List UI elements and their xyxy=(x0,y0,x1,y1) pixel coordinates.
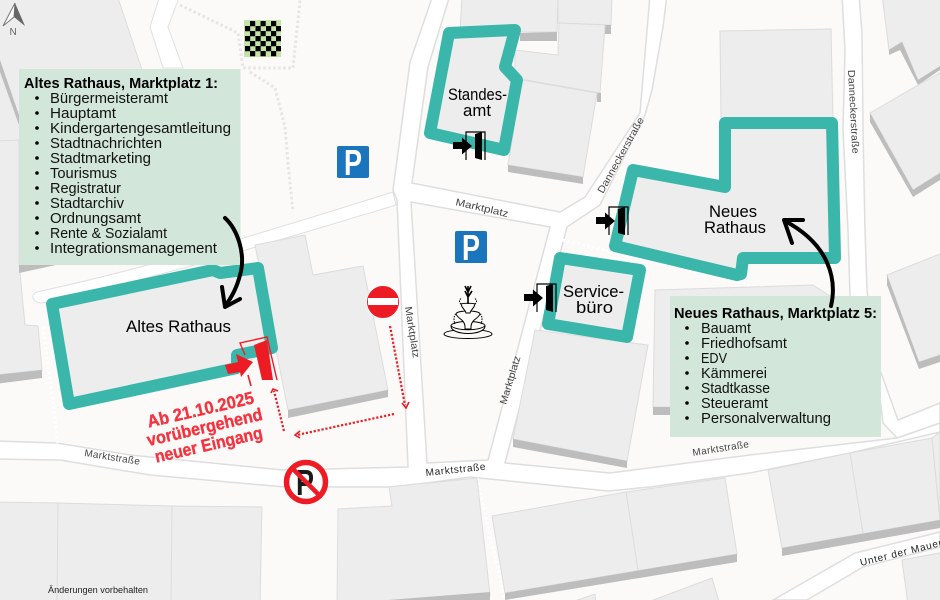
arrows: red dotted walking route xyxy=(271,326,409,438)
list: Integrationsmanagement xyxy=(50,240,218,257)
heading: Neues Rathaus, Marktplatz 5: xyxy=(674,305,877,322)
list: Stadtnachrichten xyxy=(50,135,162,152)
street labels xyxy=(84,70,940,569)
list: Stadtarchiv xyxy=(50,195,124,212)
list xyxy=(685,320,831,427)
list xyxy=(35,90,231,257)
label: Servicebüro xyxy=(563,282,624,317)
icon: parking sign upper: P xyxy=(344,142,362,183)
text: new entrance notice: vorübergehend xyxy=(145,404,264,450)
list: Personalverwaltung xyxy=(701,410,831,427)
outline: Standesamt xyxy=(430,30,517,150)
list: Kindergartengesamtleitung xyxy=(50,120,231,137)
outline: Altes Rathaus xyxy=(52,268,272,404)
icon: fountain xyxy=(444,286,492,338)
label: Standesamt xyxy=(448,85,507,120)
label: Marktplatz vertical: Marktplatz xyxy=(402,306,421,359)
text: new entrance notice: neuer Eingang xyxy=(153,422,264,467)
note: subject to change: Änderungen vorbehalten xyxy=(48,585,148,595)
icon: north arrow: N xyxy=(10,27,17,38)
icon: parking sign lower: P xyxy=(462,227,480,268)
label: Neues Rathaus xyxy=(704,202,766,237)
label: Standesamt: Standes- xyxy=(448,85,507,104)
label: Dannecker diagonal: Danneckerstraße xyxy=(596,115,647,195)
list: Rente & Sozialamt xyxy=(50,225,168,242)
list: Friedhofsamt xyxy=(701,335,788,352)
icon: entrance Servicebüro xyxy=(524,284,556,312)
label: Dannecker vertical: Danneckerstraße xyxy=(845,70,860,155)
icon: entrance Neues Rathaus xyxy=(596,207,628,235)
list: Tourismus xyxy=(50,165,117,182)
list: Bauamt xyxy=(701,320,752,337)
text: new entrance notice xyxy=(141,386,268,468)
list: Stadtkasse xyxy=(701,380,770,397)
icon: no entry sign xyxy=(366,286,400,318)
icon: temporary red entrance xyxy=(225,337,277,386)
list: Bürgermeisteramt xyxy=(50,90,169,107)
list: Registratur xyxy=(50,180,121,197)
list: EDV xyxy=(701,350,727,367)
outline: Neues Rathaus xyxy=(615,123,835,275)
label: Servicebüro: büro xyxy=(576,298,613,317)
label: Standesamt: amt xyxy=(463,101,491,120)
label: Neues Rathaus: Neues xyxy=(709,202,757,221)
label: Marktplatz diagonal: Marktplatz xyxy=(498,355,523,406)
list: Stadtmarketing xyxy=(50,150,151,167)
panel: Neues Rathaus departments xyxy=(670,296,881,437)
label: Servicebüro: Service- xyxy=(563,282,624,301)
outline: Servicebüro xyxy=(548,258,640,337)
label: Altes Rathaus: Altes Rathaus xyxy=(126,317,231,336)
list: Kämmerei xyxy=(701,365,767,382)
icon: entrance Standesamt xyxy=(453,132,485,160)
label: Marktstraße east: Marktstraße xyxy=(692,439,750,459)
label: Neues Rathaus: Rathaus xyxy=(704,218,766,237)
icon: north arrow xyxy=(3,3,25,38)
icon: no parking sign xyxy=(286,462,326,503)
arrow: to Neues Rathaus xyxy=(784,220,833,306)
icon: no parking sign: P xyxy=(296,462,314,503)
list: Steueramt xyxy=(701,395,769,412)
label: Marktstraße west: Marktstraße xyxy=(84,448,141,468)
panel: Altes Rathaus departments xyxy=(19,69,240,265)
list: Hauptamt xyxy=(50,105,117,122)
heading: Altes Rathaus, Marktplatz 1: xyxy=(24,75,218,92)
arrow: to Altes Rathaus xyxy=(222,218,242,307)
list: Ordnungsamt xyxy=(50,210,142,227)
label: Marktplatz top: Marktplatz xyxy=(454,197,509,220)
icon: checkered flag pattern xyxy=(244,20,281,57)
text: new entrance notice: Ab 21.10.2025 xyxy=(145,387,256,432)
label: Marktstraße centre: Marktstraße xyxy=(425,462,486,479)
